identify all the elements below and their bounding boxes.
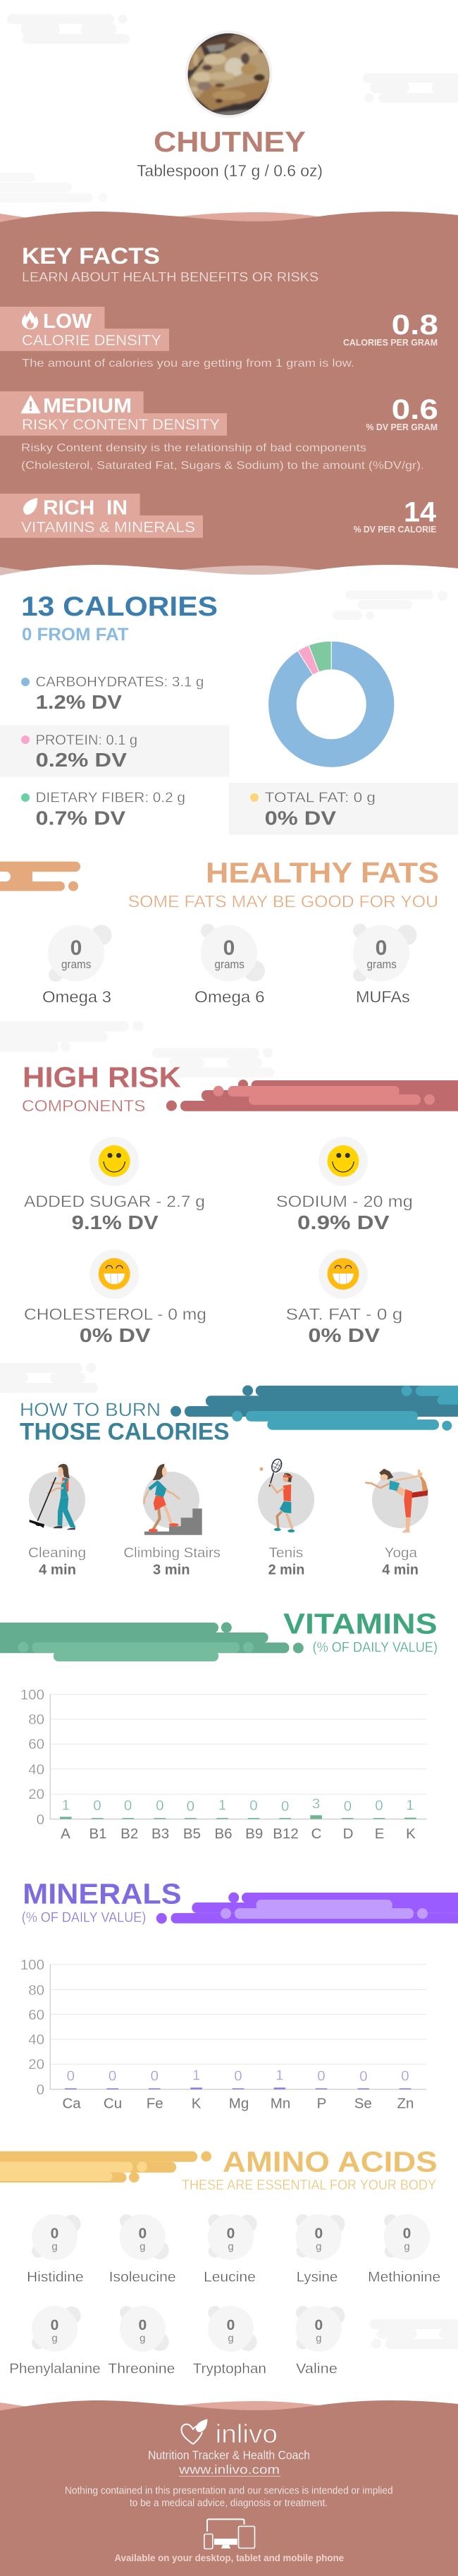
heading: minerals: MINERALS (23, 1878, 181, 1910)
risk item: added sugar (24, 1137, 205, 1233)
bar chart: vitamins: B12 (273, 1826, 299, 1842)
activity: climbing stairs (123, 1464, 221, 1577)
amino: leucine: 0 (227, 2226, 235, 2242)
title: CHUTNEY (154, 126, 306, 158)
vitamins and minerals value (354, 496, 437, 535)
icon: tennis player (259, 1458, 295, 1532)
stat: omega 6: 0 (223, 936, 235, 960)
activity: climbing stairs: Climbing Stairs (123, 1545, 221, 1561)
amino: tryptophan: 0 (227, 2317, 235, 2333)
heading: those calories: THOSE CALORIES (20, 1419, 230, 1446)
bar chart: minerals: K (192, 2095, 202, 2111)
heading: amino acids: AMINO ACIDS (223, 2146, 438, 2178)
bar chart: vitamins: 1 (218, 1797, 226, 1813)
bar chart: minerals: 60 (28, 2007, 44, 2023)
bar chart: minerals: 0 (109, 2068, 116, 2084)
amino: lysine: Lysine (297, 2269, 338, 2285)
bar chart: vitamins: K (406, 1826, 416, 1842)
bar chart: vitamins: 0 (375, 1797, 383, 1814)
icon: flame (22, 310, 38, 329)
bar chart: minerals: 1 (192, 2068, 200, 2084)
legend: total fat (229, 783, 458, 835)
activity: yoga: 4 min (382, 1562, 419, 1577)
bar chart: minerals: Mn (271, 2095, 290, 2111)
calorie density value: CALORIES PER GRAM (343, 337, 438, 348)
vitamins and minerals label: RICH IN (43, 496, 128, 519)
subheading: vitamins: (% OF DAILY VALUE) (313, 1640, 438, 1655)
bar chart: vitamins (20, 1687, 426, 1842)
tagline: Nutrition Tracker & Health Coach (148, 2448, 310, 2462)
bar chart: vitamins: A (61, 1826, 70, 1842)
bar chart: minerals: Mg (229, 2095, 249, 2111)
subheading: healthy fats: SOME FATS MAY BE GOOD FOR YOU (128, 893, 438, 912)
decorative cloud: top right (363, 73, 458, 103)
amino: tryptophan (193, 2306, 266, 2376)
decorative bars: high risk (166, 1080, 458, 1111)
bar chart: minerals: 40 (28, 2032, 44, 2048)
bar chart: minerals: 100 (20, 1957, 44, 1973)
bar chart: minerals: Zn (397, 2095, 414, 2111)
amino: phenylalanine (9, 2306, 101, 2376)
icon: leaf (23, 498, 37, 515)
bar chart: vitamins: 0 (281, 1798, 289, 1814)
vitamins and minerals label (0, 494, 203, 538)
icon: devices (204, 2519, 255, 2548)
donut chart (268, 641, 395, 767)
risk item: saturated fat: SAT. FAT - 0 g (286, 1305, 402, 1324)
bar chart: minerals: Fe (147, 2095, 163, 2111)
bar chart: minerals (20, 1957, 426, 2111)
legend: protein (0, 725, 230, 777)
activity: yoga: Yoga (385, 1545, 418, 1561)
heading: vitamins: VITAMINS (283, 1608, 438, 1640)
risk item: cholesterol (24, 1250, 206, 1346)
subheading: amino acids: THESE ARE ESSENTIAL FOR YOUR BODY (182, 2178, 436, 2193)
calorie density label: LOW (43, 310, 92, 333)
icon: warning triangle (21, 396, 40, 413)
risk item: saturated fat: 0% DV (308, 1324, 380, 1346)
bar chart: minerals: 0 (37, 2082, 44, 2098)
bar chart: vitamins: 1 (62, 1797, 70, 1813)
bar chart: minerals: Ca (62, 2095, 81, 2111)
icon: woman sweeping (30, 1464, 75, 1530)
amino: tryptophan: g (228, 2332, 234, 2344)
bar chart: vitamins: 0 (344, 1798, 352, 1814)
heading: key facts: KEY FACTS (22, 243, 160, 269)
stat: mufas: MUFAs (356, 988, 410, 1006)
calorie density value (343, 310, 438, 348)
subheading: components: COMPONENTS (22, 1097, 145, 1115)
decorative bars: amino acids (0, 2151, 211, 2183)
bar chart: minerals: P (317, 2095, 326, 2111)
risky content description (21, 442, 424, 472)
bar chart: vitamins: D (343, 1826, 353, 1842)
amino: methionine: 0 (403, 2226, 411, 2242)
vitamins and minerals value: % DV PER CALORIE (354, 524, 437, 535)
amino: lysine: 0 (314, 2226, 323, 2242)
website: www.inlivo.com (178, 2462, 280, 2477)
amino: methionine: Methionine (368, 2269, 440, 2285)
risk item: added sugar: ADDED SUGAR - 2.7 g (24, 1192, 205, 1211)
bar chart: minerals: 0 (401, 2068, 409, 2084)
stat: omega 3 (42, 925, 111, 1006)
decorative bars: burn (171, 1385, 458, 1431)
amino: isoleucine: 0 (138, 2226, 147, 2242)
activity: cleaning: 4 min (39, 1562, 76, 1577)
bar chart: vitamins: 40 (28, 1762, 44, 1778)
legend: protein: 0.2% DV (35, 749, 127, 771)
amino: methionine (368, 2214, 440, 2285)
calorie density description: The amount of calories you are getting from 1 gram is low. (22, 358, 354, 370)
amino: valine: Valine (296, 2361, 338, 2376)
icon: smile face (328, 1145, 359, 1177)
amino: isoleucine (109, 2214, 176, 2285)
stat: mufas (353, 924, 417, 1006)
bar chart: minerals: 0 (234, 2068, 242, 2084)
amino: leucine (204, 2214, 257, 2285)
calorie density label (0, 307, 169, 351)
bar chart: minerals: 0 (317, 2068, 326, 2084)
stat: omega 6: grams (214, 958, 245, 971)
risky content label: MEDIUM (43, 395, 132, 417)
amino: histidine: 0 (51, 2226, 58, 2242)
stat: mufas: 0 (376, 936, 387, 960)
legend: total fat: TOTAL FAT: 0 g (265, 790, 376, 806)
legend: dietary fiber: DIETARY FIBER: 0.2 g (35, 790, 185, 806)
icon: grin face (328, 1258, 359, 1290)
bar chart: minerals: 0 (151, 2068, 159, 2084)
amino: threonine (108, 2306, 175, 2376)
availability note: Available on your desktop, tablet and mobile phone (114, 2552, 344, 2563)
serving size: Tablespoon (17 g / 0.6 oz) (137, 161, 323, 180)
legend: protein: PROTEIN: 0.1 g (35, 732, 137, 748)
amino: tryptophan: Tryptophan (193, 2361, 266, 2376)
legend: carbohydrates: 1.2% DV (36, 691, 122, 713)
stat: mufas: grams (366, 958, 397, 971)
bar chart: minerals: Se (354, 2095, 372, 2111)
bar chart: minerals: 20 (28, 2056, 44, 2073)
amino: threonine: 0 (138, 2317, 147, 2333)
amino: leucine: Leucine (204, 2269, 256, 2285)
bar chart: vitamins: B6 (214, 1826, 233, 1842)
stat: omega 3: grams (61, 958, 91, 971)
icon: grin face (99, 1258, 130, 1290)
amino: leucine: g (228, 2240, 234, 2252)
amino: threonine: g (140, 2332, 145, 2344)
stat: omega 3: Omega 3 (42, 988, 111, 1006)
panel: footer (0, 2400, 458, 2576)
subheading: minerals: (% OF DAILY VALUE) (22, 1910, 146, 1925)
activity: cleaning: Cleaning (28, 1545, 86, 1561)
bar chart: vitamins: E (375, 1826, 384, 1842)
logo wordmark: inlivo (216, 2419, 278, 2448)
subheading: key facts: LEARN ABOUT HEALTH BENEFITS OR RISKS (22, 270, 318, 284)
legend: dietary fiber (21, 790, 185, 829)
bar chart: vitamins: 20 (28, 1786, 44, 1802)
activity: tennis: Tenis (268, 1545, 303, 1561)
risk item: sodium: 0.9% DV (297, 1211, 390, 1233)
bar chart: vitamins: 1 (406, 1797, 414, 1813)
amino: threonine: Threonine (108, 2361, 175, 2376)
legend: carbohydrates: CARBOHYDRATES: 3.1 g (35, 674, 204, 690)
stat: omega 6: Omega 6 (194, 988, 265, 1006)
heading: healthy fats: HEALTHY FATS (206, 857, 439, 889)
decorative cloud: burn (0, 1363, 98, 1393)
bar chart: vitamins: B2 (120, 1826, 138, 1842)
bar chart: minerals: 0 (359, 2068, 368, 2084)
subheading: from fat: 0 FROM FAT (22, 625, 128, 645)
legend: carbohydrates (21, 674, 204, 713)
activity: yoga (365, 1469, 428, 1577)
disclaimer: to be a medical advice, diagnosis or treatment. (130, 2498, 328, 2509)
risky content value: % DV PER GRAM (366, 422, 438, 432)
bar chart: vitamins: 60 (28, 1736, 44, 1752)
amino: valine (296, 2306, 345, 2376)
bar chart: vitamins: B3 (151, 1826, 169, 1842)
icon: woman on stairs (144, 1464, 202, 1535)
risk item: cholesterol: 0% DV (80, 1324, 151, 1346)
decorative cloud: top left (7, 14, 130, 44)
amino: valine: g (316, 2332, 321, 2344)
risk item: added sugar: 9.1% DV (72, 1211, 159, 1233)
stat: omega 3: 0 (70, 936, 82, 960)
risk item: sodium (276, 1137, 413, 1233)
decorative bars: healthy fats (0, 862, 80, 891)
bar chart: vitamins: 0 (124, 1797, 132, 1814)
stat: omega 6 (194, 924, 265, 1006)
food photo (185, 30, 273, 120)
bar chart: vitamins: 80 (28, 1711, 44, 1728)
bar chart: minerals: 80 (28, 1982, 44, 1998)
bar chart: vitamins: 0 (156, 1797, 164, 1814)
decorative bars: minerals (156, 1893, 458, 1924)
bar chart: vitamins: 0 (249, 1797, 258, 1814)
legend: total fat: 0% DV (265, 807, 336, 829)
icon: smile face (99, 1145, 130, 1177)
heading: high risk: HIGH RISK (23, 1061, 181, 1094)
bar chart: vitamins: 0 (37, 1812, 44, 1828)
amino: lysine: g (316, 2240, 321, 2252)
bar chart: vitamins: 100 (20, 1687, 44, 1703)
activity: climbing stairs: 3 min (153, 1562, 190, 1577)
heading: calories: 13 CALORIES (21, 592, 218, 622)
icon: inlivo heart logo (181, 2420, 207, 2444)
amino: histidine: Histidine (27, 2269, 84, 2285)
decorative cloud: calories (333, 590, 447, 620)
amino: phenylalanine: Phenylalanine (9, 2361, 101, 2376)
bar chart: vitamins: C (311, 1826, 322, 1842)
amino: isoleucine: g (140, 2240, 145, 2252)
disclaimer (65, 2486, 393, 2509)
risky content label (0, 391, 227, 436)
bar chart: minerals: 0 (67, 2068, 75, 2084)
calorie density value: 0.8 (392, 310, 438, 341)
decorative cloud: amino (369, 2319, 458, 2349)
decorative cloud: mid left (0, 173, 107, 202)
vitamins and minerals value: 14 (404, 496, 437, 527)
amino: histidine (27, 2214, 84, 2285)
heading: how to burn: HOW TO BURN (20, 1399, 161, 1420)
bar chart: vitamins: 3 (312, 1796, 320, 1812)
vitamins and minerals label: VITAMINS & MINERALS (21, 519, 195, 535)
activity: tennis (258, 1458, 314, 1577)
bar chart: minerals: 1 (276, 2068, 284, 2084)
panel: key facts (0, 212, 458, 589)
decorative clouds: high risk (0, 1021, 274, 1078)
amino: methionine: g (404, 2240, 410, 2252)
amino: phenylalanine: g (51, 2332, 58, 2344)
amino: valine: 0 (314, 2317, 323, 2333)
risky content value: 0.6 (392, 394, 438, 425)
amino: phenylalanine: 0 (51, 2317, 58, 2333)
risky content label: RISKY CONTENT DENSITY (22, 417, 220, 433)
decorative bars: vitamins (0, 1622, 304, 1661)
icon: yoga pose (365, 1469, 428, 1532)
risky content value (366, 394, 438, 432)
bar chart: vitamins: B9 (245, 1826, 263, 1842)
risk item: saturated fat (286, 1250, 402, 1346)
risk item: cholesterol: CHOLESTEROL - 0 mg (24, 1305, 206, 1324)
risk item: sodium: SODIUM - 20 mg (276, 1192, 413, 1211)
amino: isoleucine: Isoleucine (109, 2269, 176, 2285)
bar chart: vitamins: B1 (89, 1826, 107, 1842)
amino: lysine (296, 2214, 345, 2285)
disclaimer: Nothing contained in this presentation and our services is intended or implied (65, 2486, 393, 2497)
risky content description: Risky Content density is the relationship of bad components (21, 442, 366, 454)
activity: tennis: 2 min (268, 1562, 304, 1577)
legend: dietary fiber: 0.7% DV (35, 807, 125, 829)
calorie density label: CALORIE DENSITY (22, 332, 161, 348)
bar chart: vitamins: 0 (187, 1798, 194, 1814)
amino: histidine: g (51, 2240, 58, 2252)
bar chart: vitamins: 0 (93, 1797, 101, 1814)
risky content description: (Cholesterol, Saturated Fat, Sugars & Sodium) to the amount (%DV/gr). (21, 460, 424, 472)
activity: cleaning (28, 1464, 86, 1577)
bar chart: minerals: Cu (104, 2095, 122, 2111)
bar chart: vitamins: B5 (183, 1826, 201, 1842)
